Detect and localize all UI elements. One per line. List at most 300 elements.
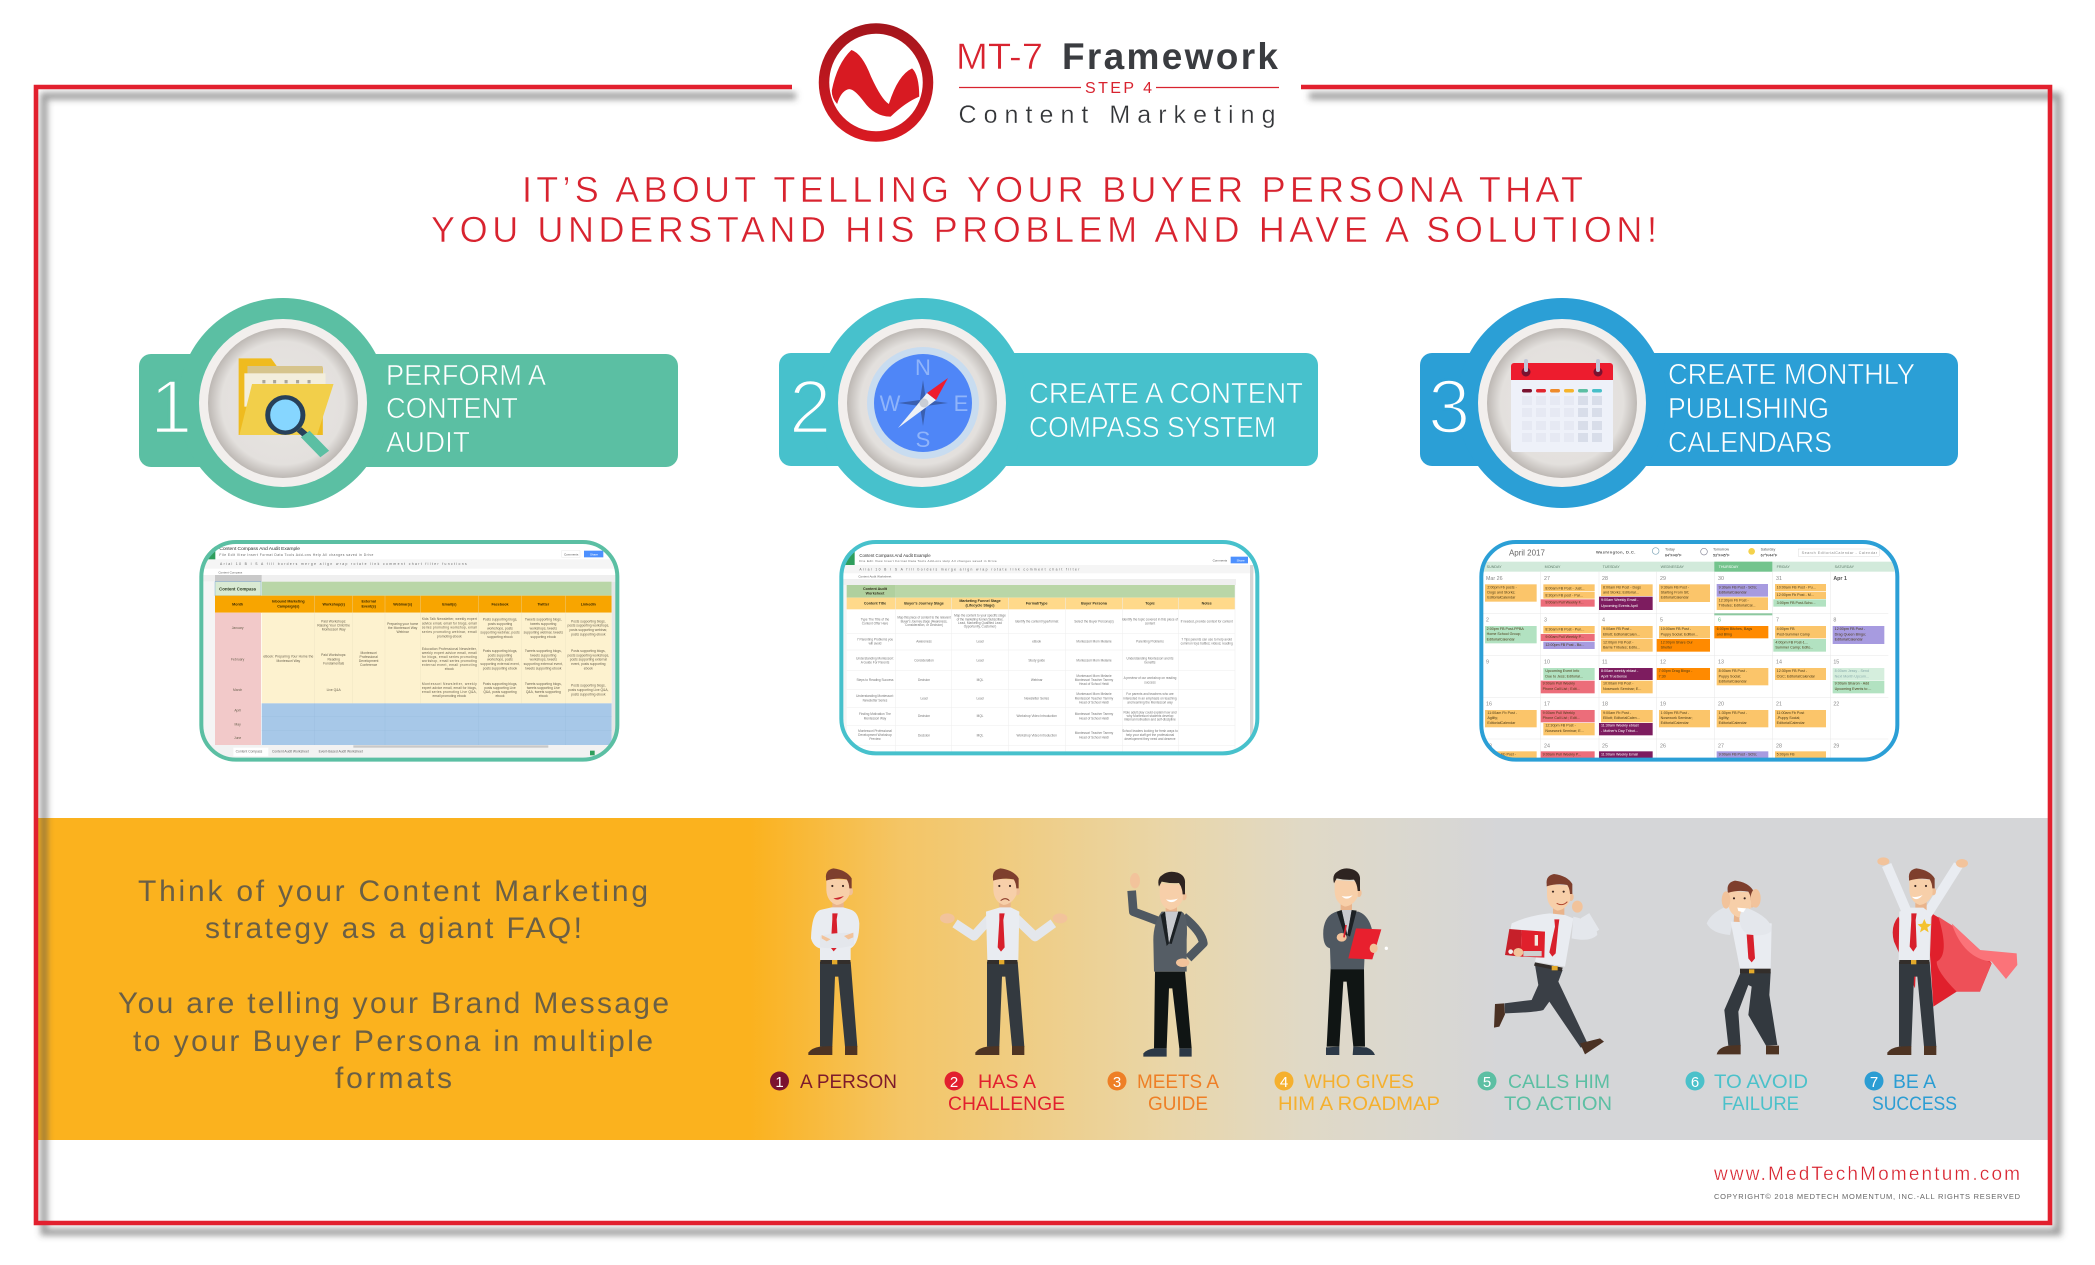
screenshot: content audit spreadsheet: eBook	[1032, 639, 1042, 643]
screenshot: content compass spreadsheet: posts supporting ebook	[571, 632, 606, 636]
screenshot: content compass spreadsheet: Twitter	[537, 603, 550, 607]
screenshot: content compass spreadsheet: tweets supporting	[530, 653, 557, 657]
screenshot: monthly calendar: Elliott; EditorialCalen...	[1603, 716, 1640, 720]
screenshot: content compass spreadsheet: April	[234, 708, 241, 712]
screenshot: content compass spreadsheet: posts supporting	[488, 653, 512, 657]
text block: FAQ message	[118, 875, 669, 1095]
screenshot: content audit spreadsheet: For parents and teachers who are	[1126, 692, 1174, 696]
screenshot: monthly calendar: 6	[1718, 618, 1721, 624]
screenshot: monthly calendar: 8:00am Jessy - Send	[1835, 669, 1869, 673]
logo	[824, 28, 928, 136]
screenshot: monthly calendar: 12:30pm Fb Post -	[1719, 598, 1750, 602]
screenshot: content compass spreadsheet: Content Audit Worksheet	[272, 750, 309, 754]
screenshot: content audit spreadsheet: Share	[1237, 558, 1245, 562]
screenshot: monthly calendar: 64°F/49°F	[1665, 553, 1682, 557]
screenshot: monthly calendar: 20	[1718, 701, 1724, 707]
screenshot: monthly calendar: Upcoming Event Info	[1545, 669, 1579, 673]
screenshot: monthly calendar: Drag Queen Bingo;	[1835, 632, 1866, 636]
screenshot: content compass spreadsheet: expert advice email, email for blogs,	[422, 686, 477, 690]
screenshot: content audit spreadsheet: interested in an emphasis on teaching	[1123, 696, 1177, 700]
screenshot: monthly calendar: SUNDAY	[1487, 565, 1502, 569]
screenshot: content compass spreadsheet: supporting ebook	[487, 635, 513, 639]
panel: step 3 banner: 3	[1428, 365, 1470, 450]
screenshot: monthly calendar: Mar 26	[1486, 576, 1503, 582]
screenshot: monthly calendar: 5:00pm FB	[1777, 753, 1795, 757]
screenshot: content compass spreadsheet: posts supporting external	[570, 658, 607, 662]
screenshot: content compass spreadsheet: March	[233, 688, 242, 692]
screenshot: monthly calendar: Puppy Social; Edition...	[1661, 632, 1698, 636]
screenshot: monthly calendar: 12:00pm FB Post -	[1835, 627, 1866, 631]
screenshot: content audit spreadsheet: Lead, Marketing Qualified Lead	[958, 621, 1002, 625]
screenshot: content compass spreadsheet: email series promoting Live Q&A,	[422, 690, 477, 694]
screenshot: content compass spreadsheet: posts supporting ebook	[483, 666, 518, 670]
screenshot: content audit spreadsheet: Map this piece of content to the relevant	[897, 616, 951, 620]
step 2 label: COMPASS SYSTEM	[1029, 412, 1276, 444]
screenshot: monthly calendar: CGC; EditorialCalendar	[1777, 674, 1816, 678]
screenshot: content compass spreadsheet: workshops, posts	[487, 626, 513, 630]
label 4: who gives him a roadmap: WHO GIVES	[1304, 1071, 1414, 1093]
screenshot: content audit spreadsheet: Understanding Montessori:	[856, 694, 894, 698]
screenshot: content compass spreadsheet: posts supporting workshops,	[567, 653, 609, 657]
screenshot: monthly calendar: 31	[1776, 576, 1782, 582]
label 4: who gives him a roadmap	[1274, 1071, 1440, 1115]
screenshot: monthly calendar: Summer Camp; Edito...	[1775, 646, 1813, 650]
screenshot: monthly calendar: 12:00pm FB Post - Bo...	[1545, 643, 1584, 647]
panel: step 1 banner: 1	[150, 365, 192, 450]
screenshot: content audit spreadsheet: Comments	[1213, 558, 1228, 562]
screenshot: content audit spreadsheet: help your staff get the professional	[1126, 733, 1174, 737]
screenshot: content audit spreadsheet: Workshop Video Introduction	[1016, 714, 1057, 718]
screenshot: content audit spreadsheet: Worksheet	[866, 591, 885, 595]
label 6: to avoid failure	[1686, 1071, 1808, 1115]
label 2: has a challenge: CHALLENGE	[948, 1093, 1065, 1115]
subtitle: step 4: STEP 4	[1085, 80, 1152, 97]
screenshot: content compass spreadsheet: ebook	[445, 667, 454, 671]
icon: compass: W	[880, 391, 901, 416]
icon: compass: S	[916, 427, 930, 452]
screenshot: monthly calendar: 25	[1602, 743, 1608, 749]
screenshot: monthly calendar: 12:30pm FB Post -	[1545, 724, 1577, 728]
label 2: has a challenge: HAS A	[978, 1071, 1036, 1093]
screenshot: content compass spreadsheet: February	[231, 658, 245, 662]
screenshot: content audit spreadsheet: 7 Parenting Problems you	[857, 637, 893, 641]
label 7: be a success: SUCCESS	[1872, 1093, 1957, 1115]
screenshot: monthly calendar: 9:00am FB Post -	[1603, 627, 1632, 631]
screenshot: content audit spreadsheet: File Edit View Insert Format Data Tools Add-ons Help All changes saved in Drive	[859, 559, 997, 563]
screenshot: content audit spreadsheet: of the marketing funnel (Subscriber,	[957, 617, 1003, 621]
screenshot: content compass spreadsheet: event, posts supporting	[571, 662, 606, 666]
screenshot: monthly calendar: 10:00am FB Post - Pu...	[1777, 586, 1816, 590]
screenshot: content compass spreadsheet: posts supporting webinar,	[569, 628, 607, 632]
screenshot: content compass spreadsheet: Posts supporting blogs,	[571, 684, 606, 688]
screenshot: monthly calendar: 13	[1718, 659, 1724, 665]
screenshot: monthly calendar: 10	[1544, 659, 1550, 665]
screenshot: content audit spreadsheet: Head of School Heidi	[1079, 735, 1109, 739]
screenshot: content audit spreadsheet: Buyer's Journey stage (Awareness,	[901, 619, 947, 623]
icon: calendar	[1511, 359, 1613, 452]
screenshot: content audit spreadsheet: internal motivation and self-discipline	[1124, 718, 1176, 722]
screenshot: content compass spreadsheet: Montessori Way	[276, 659, 301, 663]
screenshot: content audit spreadsheet: Workshop Video Introduction	[1016, 733, 1057, 737]
screenshot: monthly calendar: Saturday	[1761, 547, 1775, 551]
screenshot: monthly calendar: 9:00am Pull Weekly F...	[1545, 601, 1583, 605]
text block: FAQ message: to your Buyer Persona in multiple	[133, 1025, 653, 1058]
screenshot: monthly calendar: 24	[1544, 743, 1550, 749]
screenshot: content compass spreadsheet	[199, 540, 622, 762]
screenshot: content compass spreadsheet: supporting external event,	[524, 662, 563, 666]
screenshot: content compass spreadsheet: workshop, email series promoting	[422, 659, 477, 663]
step 3 label	[1668, 359, 1915, 459]
screenshot: content compass spreadsheet: Preparing your home	[387, 622, 418, 626]
headline: IT’S ABOUT TELLING YOUR BUYER PERSONA THAT	[522, 169, 1583, 210]
screenshot: content compass spreadsheet: workshops, tweets	[530, 658, 557, 662]
step 3 label: CREATE MONTHLY	[1668, 359, 1915, 391]
screenshot: content audit spreadsheet: Content Compass And Audit Example	[859, 553, 931, 558]
screenshot: content audit spreadsheet: Identify the topic covered in this piece of	[1122, 617, 1178, 621]
screenshot: monthly calendar: April TrueSense	[1601, 674, 1627, 678]
screenshot: monthly calendar: and Bling	[1717, 632, 1732, 636]
screenshot: content audit spreadsheet: Development Workshop	[858, 733, 892, 737]
screenshot: content compass spreadsheet: workshops, posts	[487, 658, 513, 662]
screenshot: monthly calendar: 12:00pm FB Post -	[1603, 640, 1634, 644]
screenshot: monthly calendar: THURSDAY	[1719, 565, 1739, 569]
screenshot: content compass spreadsheet: supporting external event,	[480, 662, 520, 666]
label 5: calls him to action	[1478, 1071, 1612, 1115]
screenshot: content audit spreadsheet: (Lifecycle Stage)	[965, 604, 995, 608]
screenshot: content compass spreadsheet: Webinar	[396, 630, 410, 634]
step 3 label: CALENDARS	[1668, 427, 1832, 459]
screenshot: content audit spreadsheet: Understanding Montessori and its	[1126, 656, 1174, 660]
panel: step 2 banner	[779, 298, 1318, 508]
screenshot: content compass spreadsheet: posts supporting Live	[484, 686, 516, 690]
screenshot: content compass spreadsheet: tweets supporting Live	[527, 686, 560, 690]
screenshot: content compass spreadsheet: Development	[359, 659, 379, 663]
headline	[431, 169, 1657, 250]
step 1 label: AUDIT	[386, 427, 470, 459]
screenshot: monthly calendar: 53°F/45°F	[1713, 553, 1730, 557]
label 3: meets a guide	[1108, 1071, 1219, 1115]
label 4: who gives him a roadmap: 4	[1280, 1074, 1288, 1091]
label 7: be a success: 7	[1870, 1074, 1878, 1091]
screenshot: monthly calendar: 10:00am FB Post -	[1661, 627, 1692, 631]
screenshot: monthly calendar: 9:30am FB Post -	[1661, 585, 1690, 589]
screenshot: content audit spreadsheet: If needed, provide context for content	[1181, 619, 1233, 623]
screenshot: content compass spreadsheet: Facebook	[491, 603, 509, 607]
screenshot: content audit spreadsheet: Consideration, or Decision)	[905, 623, 943, 627]
screenshot: content compass spreadsheet: January	[232, 626, 244, 630]
label 1: a person: 1	[775, 1074, 784, 1091]
screenshot: content compass spreadsheet: Posts supporting blogs,	[483, 682, 517, 686]
screenshot: monthly calendar: EditorialCalendar	[1777, 721, 1805, 725]
screenshot: content audit spreadsheet: Select the Buyer Persona(s)	[1074, 619, 1114, 623]
screenshot: content compass spreadsheet: Raising Your Child the	[317, 624, 350, 628]
screenshot: content audit spreadsheet: Content Offer Here	[862, 622, 889, 626]
screenshot: monthly calendar: and Storks; Editorial...	[1603, 591, 1639, 595]
screenshot: monthly calendar: WEDNESDAY	[1661, 565, 1685, 569]
screenshot: content compass spreadsheet: for blogs, email series promoting	[422, 655, 477, 659]
screenshot: content compass spreadsheet: workshops, tweets	[530, 626, 557, 630]
screenshot: content audit spreadsheet: Newsletter Series	[863, 698, 888, 702]
screenshot: monthly calendar: Today	[1665, 547, 1675, 551]
screenshot: content compass spreadsheet: Education Professional Newsletter,	[422, 647, 477, 651]
screenshot: content audit spreadsheet: Type The Title of the	[861, 617, 890, 621]
screenshot: content audit spreadsheet	[839, 540, 1259, 755]
screenshot: content audit spreadsheet: Opportunity, Customer)	[964, 625, 996, 629]
step 1 label	[386, 360, 547, 459]
footer copyright: COPYRIGHT© 2018 MEDTECH MOMENTUM, INC.-ALL RIGHTS RESERVED	[1714, 1192, 2021, 1201]
screenshot: monthly calendar: 27	[1544, 576, 1550, 582]
screenshot: content audit spreadsheet: Head of School Heidi	[1079, 701, 1109, 705]
screenshot: monthly calendar: 22	[1833, 701, 1839, 707]
screenshot: content audit spreadsheet: Finding Motivation The	[859, 712, 891, 716]
label 3: meets a guide: 3	[1113, 1074, 1121, 1091]
screenshot: monthly calendar: 8:30am FB Post - Pun...	[1545, 628, 1584, 632]
label 6: to avoid failure: 6	[1691, 1074, 1699, 1091]
screenshot: content audit spreadsheet: Parenting Problems	[1136, 639, 1164, 643]
screenshot: monthly calendar: 67°F/44°F	[1761, 553, 1778, 557]
screenshot: content compass spreadsheet: series promoting webinar, email	[422, 630, 477, 634]
screenshot: monthly calendar: EditorialCalendar	[1719, 680, 1747, 684]
screenshot: monthly calendar: Search EditorialCalendar - Calendar	[1802, 551, 1878, 555]
screenshot: monthly calendar: 9	[1486, 659, 1489, 665]
screenshot: monthly calendar: 11:00am Weekly Email	[1601, 753, 1638, 757]
screenshot: content audit spreadsheet: MQL	[977, 678, 984, 682]
screenshot: content compass spreadsheet: Posts supporting blogs,	[483, 618, 517, 622]
screenshot: content audit spreadsheet: MQL	[977, 733, 984, 737]
screenshot: content compass spreadsheet: posts supporting workshops,	[567, 624, 609, 628]
icon: compass: N	[915, 355, 931, 380]
screenshot: monthly calendar: EditorialCalendar	[1835, 638, 1863, 642]
screenshot: content compass spreadsheet: Montessori Newsletter, weekly	[422, 682, 477, 686]
screenshot: content audit spreadsheet: Content Audit Worksheet	[858, 574, 891, 578]
screenshot: content compass spreadsheet: email promoting ebook	[432, 694, 467, 698]
screenshot: monthly calendar: 12:30pm FB Post -	[1777, 669, 1808, 673]
screenshot: content audit spreadsheet: Newsletter Series	[1024, 696, 1049, 700]
screenshot: monthly calendar: 8	[1833, 618, 1836, 624]
screenshot: content compass spreadsheet: Tweets supporting blogs,	[525, 682, 562, 686]
screenshot: monthly calendar: 11:00am Fb Post -	[1487, 711, 1518, 715]
screenshot: monthly calendar: Home School Group;	[1487, 632, 1521, 636]
screenshot: content audit spreadsheet: Steps to Reading Success	[856, 678, 894, 682]
screenshot: monthly calendar: 8:00am FB Post -	[1719, 669, 1748, 673]
screenshot: content compass spreadsheet: Q&A, tweets supporting	[526, 690, 561, 694]
panel: step 2 banner: 2	[789, 365, 831, 450]
title: MT-7 Framework: MT-7	[956, 36, 1043, 77]
screenshot: monthly calendar: Apr 1	[1833, 576, 1847, 582]
screenshot: content compass spreadsheet: File Edit View Insert Format Data Tools Add-ons Help All changes saved in Drive	[219, 553, 373, 557]
screenshot: content audit spreadsheet: Identify the content type/format	[1015, 619, 1058, 623]
screenshot: monthly calendar: 3:00pm FB Post-Scho...	[1777, 601, 1815, 605]
figure 7: be a success with cape	[1877, 857, 2017, 1055]
screenshot: monthly calendar: 19	[1660, 701, 1666, 707]
label 2: has a challenge: 2	[950, 1074, 958, 1091]
screenshot: content audit spreadsheet: success	[1144, 680, 1156, 684]
figure 5: calls him to action	[1494, 874, 1604, 1054]
screenshot: monthly calendar: EditorialCalendar	[1487, 721, 1516, 725]
screenshot: content compass spreadsheet: ebook	[584, 666, 593, 670]
screenshot: monthly calendar: 27	[1718, 743, 1724, 749]
screenshot: content compass spreadsheet: Professional	[360, 655, 378, 659]
screenshot: content compass spreadsheet: May	[235, 722, 241, 726]
screenshot: monthly calendar: Elliott; EditorialCalen...	[1603, 632, 1640, 636]
screenshot: content audit spreadsheet: Content Audit	[863, 587, 888, 591]
screenshot: monthly calendar: 4:00pm FB Post-1...	[1775, 640, 1808, 644]
screenshot: content compass spreadsheet: Montessori	[361, 651, 377, 655]
screenshot: monthly calendar: EditorialCalendar	[1487, 637, 1515, 641]
screenshot: content audit spreadsheet: Marketing Funnel Stage	[959, 599, 1001, 603]
figure 4: who gives him a roadmap	[1323, 868, 1388, 1055]
screenshot: monthly calendar: 12:00pm Fb Post - M...	[1777, 593, 1814, 597]
screenshot: content compass spreadsheet: Tweets supporting blogs,	[525, 649, 562, 653]
screenshot: monthly calendar: -Puppy Social;	[1777, 716, 1800, 720]
screenshot: monthly calendar: 9:00am Fb Post -	[1603, 711, 1632, 715]
screenshot: content compass spreadsheet: Comments	[564, 552, 579, 556]
label 5: calls him to action: 5	[1483, 1074, 1491, 1091]
screenshot: content compass spreadsheet: supporting ebook	[531, 635, 556, 639]
screenshot: monthly calendar: 1:00pm FB Post -	[1661, 711, 1690, 715]
screenshot: monthly calendar: Upcoming Events April	[1601, 604, 1638, 608]
screenshot: monthly calendar: 3	[1544, 618, 1547, 624]
screenshot: monthly calendar: Barrie Tributes; Edito...	[1603, 646, 1640, 650]
screenshot: content audit spreadsheet: Study guide	[1028, 659, 1045, 663]
screenshot: content compass spreadsheet: ebook	[495, 694, 505, 698]
screenshot: content audit spreadsheet: Buyer's Journey Stage	[904, 602, 944, 606]
screenshot: content audit spreadsheet: MQL	[977, 714, 984, 718]
screenshot: content audit spreadsheet: Montessori Mom Melanie	[1076, 692, 1112, 696]
screenshot: content audit spreadsheet: 7 Tips parents can use to help avoid	[1181, 637, 1232, 641]
screenshot: content compass spreadsheet: Content Compass	[236, 750, 263, 754]
text block: FAQ message: formats	[335, 1062, 452, 1095]
screenshot: monthly calendar: 11:30am Weekly eblast	[1601, 724, 1639, 728]
text block: FAQ message: You are telling your Brand Message	[118, 987, 669, 1020]
screenshot: monthly calendar: Due to Jess; Editorial...	[1545, 674, 1583, 678]
screenshot: content compass spreadsheet: Inbound Marketing	[272, 600, 305, 604]
icon: red wave	[832, 50, 919, 117]
icon: folder with magnifier	[239, 358, 334, 454]
screenshot: monthly calendar: Next Month Upcom...	[1835, 674, 1869, 678]
screenshot: monthly calendar: 2:00pm FB Post-PPBA	[1487, 627, 1524, 631]
screenshot: content audit spreadsheet: Montessori Mom Melanie	[1076, 674, 1112, 678]
screenshot: content audit spreadsheet: Montessori Mom Melanie	[1076, 639, 1112, 643]
screenshot: content compass spreadsheet: Campaign(s)	[277, 605, 300, 609]
screenshot: content compass spreadsheet: External	[361, 600, 376, 604]
screenshot: monthly calendar: 17	[1544, 701, 1550, 707]
screenshot: content audit spreadsheet: Lead	[976, 639, 984, 643]
screenshot: content compass spreadsheet: Tweets supporting blogs,	[525, 618, 562, 622]
figure 2: has a challenge	[940, 868, 1067, 1055]
screenshot: monthly calendar: 30	[1718, 576, 1724, 582]
screenshot: monthly calendar: Washington, D.C.	[1596, 550, 1635, 555]
screenshot: monthly calendar: Puppy Social;	[1719, 674, 1741, 678]
screenshot: content compass spreadsheet: tweets supporting	[530, 622, 557, 626]
screenshot: content audit spreadsheet: benefits	[1144, 661, 1156, 665]
screenshot: content audit spreadsheet: Role adult play could explain how and	[1123, 710, 1177, 714]
figure 3: meets a guide	[1130, 872, 1203, 1057]
screenshot: content compass spreadsheet: Content Compass	[218, 570, 243, 574]
screenshot: content compass spreadsheet: Live Q&A	[327, 688, 341, 692]
label 7: be a success	[1864, 1071, 1957, 1115]
screenshot: monthly calendar: :00am Fb Post -	[1490, 753, 1517, 757]
text block: FAQ message: strategy as a giant FAQ!	[205, 912, 582, 945]
screenshot: content audit spreadsheet: Montessori Way	[864, 716, 887, 720]
text block: FAQ message: Think of your Content Marketing	[138, 875, 648, 908]
screenshot: content audit spreadsheet: content	[1145, 622, 1155, 626]
screenshot: content compass spreadsheet: Kids Talk Newsletter, weekly expert	[422, 617, 477, 621]
screenshot: monthly calendar: Nosework Seminar;	[1661, 716, 1693, 720]
figure 6: to avoid failure	[1707, 881, 1779, 1054]
screenshot: monthly calendar: TUESDAY	[1603, 565, 1620, 569]
label 6: to avoid failure: TO AVOID	[1714, 1071, 1808, 1093]
screenshot: content compass spreadsheet: tweets supporting ebook	[525, 666, 562, 670]
screenshot: monthly calendar: Phone Call List ; Edit...	[1543, 716, 1580, 720]
screenshot: content audit spreadsheet: Decision	[918, 678, 930, 682]
screenshot: monthly calendar: 9:00am Sharon - Add	[1835, 682, 1869, 686]
footer website: www.MedTechMomentum.com	[1713, 1164, 2020, 1185]
screenshot: monthly calendar: Dogs and Storks;	[1487, 590, 1515, 594]
screenshot: content compass spreadsheet: Conference	[360, 663, 377, 667]
screenshot: monthly calendar: 4:00pm FB	[1777, 627, 1795, 631]
screenshot: content compass spreadsheet: Content Compass	[219, 586, 257, 591]
label 5: calls him to action: TO ACTION	[1504, 1093, 1612, 1115]
screenshot: content audit spreadsheet: Preview	[869, 737, 881, 741]
screenshot: monthly calendar: 6:00pm Bitches, Bags	[1717, 627, 1752, 631]
screenshot: content audit spreadsheet: common toys battles; videos; reading	[1181, 642, 1233, 646]
step 2 label	[1029, 378, 1303, 444]
label 7: be a success: BE A	[1893, 1071, 1936, 1093]
screenshot: monthly calendar: 29	[1660, 576, 1666, 582]
screenshot: monthly calendar: 14	[1776, 659, 1782, 665]
screenshot: content compass spreadsheet: Q&A, posts supporting	[483, 690, 517, 694]
title: MT-7 Framework: Framework	[1062, 36, 1278, 77]
screenshot: monthly calendar: 8:00am FB Post - Just...	[1545, 586, 1585, 590]
screenshot: monthly calendar: 28	[1776, 743, 1782, 749]
screenshot: monthly calendar: 9:00am Pull Weekly	[1543, 682, 1575, 686]
screenshot: monthly calendar: Tributes; EditorialCal...	[1719, 604, 1756, 608]
screenshot: content compass spreadsheet: Posts supporting blogs,	[571, 619, 606, 623]
label 6: to avoid failure: FAILURE	[1722, 1093, 1799, 1115]
screenshot: monthly calendar	[1479, 540, 1899, 762]
screenshot: content audit spreadsheet: Map the content to your specific stage	[954, 614, 1006, 618]
screenshot: monthly calendar: 12:00pm Share Our	[1661, 640, 1694, 644]
screenshot: content audit spreadsheet: A preview of our workshop on reading	[1124, 676, 1177, 680]
screenshot: content audit spreadsheet: Montessori Teacher Tammy	[1075, 712, 1114, 716]
screenshot: content audit spreadsheet: Decision	[918, 714, 930, 718]
screenshot: content compass spreadsheet: posts supporting	[488, 622, 512, 626]
icon: compass: E	[954, 391, 968, 416]
screenshot: monthly calendar: 8:00am FB Post - Dogs	[1603, 586, 1641, 590]
screenshot: content compass spreadsheet: eBook: Preparing Your Home the	[263, 655, 313, 659]
screenshot: content audit spreadsheet: Arial 10 B I S A fill borders merge align wrap rotate link comment chart filter	[859, 567, 1080, 571]
headline: YOU UNDERSTAND HIS PROBLEM AND HAVE A SOLUTION!	[431, 209, 1657, 250]
screenshot: content audit spreadsheet: Buyer Persona	[1081, 602, 1108, 606]
screenshot: content audit spreadsheet: Notes	[1202, 602, 1212, 606]
screenshot: content compass spreadsheet: external event, email promoting	[422, 663, 477, 667]
screenshot: monthly calendar: 5	[1660, 618, 1663, 624]
screenshot: monthly calendar: 7:00pm Drag Bingo -	[1659, 669, 1693, 673]
screenshot: content audit spreadsheet: Lead	[976, 696, 984, 700]
screenshot: monthly calendar: 23	[1486, 743, 1492, 749]
screenshot: content compass spreadsheet: posts supporting ebook	[571, 692, 606, 696]
screenshot: monthly calendar: 8:00am weekly eblast -	[1601, 669, 1639, 673]
screenshot: content audit spreadsheet: Montessori Teacher Tammy	[1075, 678, 1114, 682]
screenshot: content audit spreadsheet: Format/Type	[1026, 602, 1048, 606]
screenshot: monthly calendar: SATURDAY	[1835, 565, 1855, 569]
screenshot: monthly calendar: Upcoming Events to ...	[1835, 687, 1871, 691]
screenshot: content compass spreadsheet: Fundamentals	[323, 662, 345, 666]
screenshot: monthly calendar: 4	[1602, 618, 1605, 624]
screenshot: monthly calendar: 9:00am FB Post - SOS;	[1719, 753, 1757, 757]
panel: step 1 banner	[139, 298, 678, 508]
